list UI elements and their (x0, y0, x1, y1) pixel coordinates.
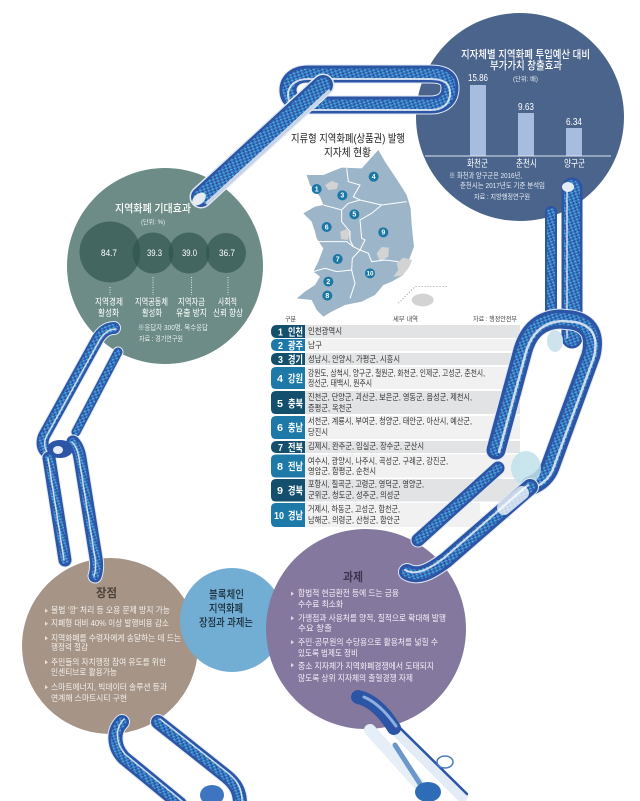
table column headers: 구분 (285, 315, 296, 323)
row labels: 3 (278, 354, 283, 366)
map number markers: 8 (325, 293, 329, 300)
advantage bullets: 행정력 절감 (51, 642, 88, 652)
panel: value-added effect bar chart (416, 13, 624, 221)
purple disc (266, 529, 466, 729)
advantage bullets: 지역화폐를 수령자에게 송달하는 데 드는 (51, 633, 181, 643)
bubble labels: 신뢰 향상 (213, 307, 243, 318)
row labels: 강원 (288, 372, 303, 385)
row labels: 8 (277, 461, 283, 473)
map number markers: 1 (315, 186, 319, 193)
advantage bullets: 지폐형 대비 40% 이상 발행비용 감소 (51, 618, 169, 628)
bar chart (425, 73, 611, 170)
chart footnote: 춘천시는 2017년도 기준 분석임 (460, 180, 545, 190)
bubble labels: 활성화 (142, 307, 162, 318)
panel footnote: ※응답자 300명, 복수응답 (138, 322, 208, 332)
challenge bullets: 수요 창출 (298, 623, 332, 633)
map number markers: 4 (372, 174, 376, 181)
panel title: 지역화폐 기대효과 (115, 201, 191, 215)
panel heading: 장점 (96, 586, 117, 600)
advantage bullets: 인센티브로 활용가능 (51, 667, 117, 677)
panel: challenges (266, 529, 466, 729)
link: top horizontal (288, 74, 450, 110)
chain: links connecting the discs (43, 74, 595, 801)
row labels (274, 326, 303, 522)
row details: 정선군, 태백시, 원주시 (308, 378, 372, 388)
link: bottom right (358, 697, 467, 801)
table column headers: 세부 내역 (393, 314, 418, 323)
row details: 군위군, 청도군, 성주군, 의성군 (308, 490, 400, 500)
row details: 여수시, 광양시, 나주시, 곡성군, 구례군, 강진군, (308, 456, 448, 466)
map of South Korea (297, 150, 447, 317)
row details: 증평군, 옥천군 (308, 403, 352, 413)
row label badges (271, 325, 305, 527)
map number markers (312, 172, 388, 301)
row details: 인천광역시 (308, 326, 342, 336)
map heading: 지류형 지역화폐(상품권) 발행 (291, 132, 405, 145)
panel: advantages (22, 558, 198, 734)
bar chart: 9.63 (518, 102, 534, 113)
link: right oval (496, 319, 595, 488)
link: left vertical (47, 440, 97, 576)
link: lower right diagonal (405, 468, 530, 574)
bubble labels: 유출 방지 (176, 308, 207, 318)
row labels: 10 (274, 510, 284, 522)
tan disc (22, 558, 198, 734)
panel: target region table (271, 314, 520, 527)
row labels: 전북 (288, 442, 303, 454)
row labels: 충북 (288, 398, 303, 410)
row labels: 6 (277, 422, 283, 434)
map heading (291, 132, 405, 159)
row labels: 7 (278, 442, 283, 454)
chart footnote: 자료 : 지방행정연구원 (474, 192, 530, 201)
row details: 남해군, 의령군, 산청군, 함안군 (308, 515, 400, 525)
callout: blockchain local currency: 장점과 과제는 (199, 616, 253, 629)
row labels: 2 (278, 340, 283, 352)
row labels: 경북 (288, 485, 303, 497)
challenge bullets: 합법적 현금환전 등에 드는 금융 (298, 588, 399, 598)
row labels: 광주 (288, 340, 303, 352)
chart footnote: ※ 화천과 양구군은 2016년, (449, 170, 522, 180)
map number markers: 5 (352, 212, 356, 219)
row labels: 전남 (288, 460, 303, 473)
challenge bullets: 있도록 법제도 정비 (298, 648, 358, 658)
bar chart: 6.34 (566, 117, 582, 128)
unit note: (단위: 배) (513, 74, 538, 83)
bubble labels: 지역경제 (95, 296, 123, 307)
row labels: 충남 (288, 421, 303, 434)
panel heading: 과제 (343, 569, 363, 584)
callout: blockchain local currency: 지역화폐 (209, 602, 243, 615)
panel footnote (138, 322, 208, 343)
map number markers: 7 (336, 256, 340, 263)
map number markers: 10 (366, 271, 374, 278)
bubble labels: 지역공동체 (135, 297, 168, 307)
panel: issuing municipalities map (291, 132, 447, 317)
callout: blockchain local currency (180, 568, 284, 672)
advantage bullets: 불법 '깡' 처리 등 오용 문제 방지 가능 (51, 605, 170, 615)
table column headers: 자료 : 행정안전부 (473, 314, 517, 323)
link: upper diagonal (190, 85, 329, 208)
map number markers: 9 (381, 230, 385, 237)
challenge bullets: 가맹점과 사용처를 양적, 질적으로 확대해 발행 (298, 613, 446, 623)
row details: 강원도, 삼척시, 양구군, 철원군, 화천군, 인제군, 고성군, 춘천시, (308, 368, 485, 378)
row details: 김제시, 완주군, 임실군, 장수군, 군산시 (308, 441, 424, 451)
green disc (67, 168, 263, 364)
unit note: (단위: %) (141, 217, 165, 226)
bar chart: 양구군 (564, 158, 585, 170)
bubble chart: 84.7 (101, 248, 117, 259)
bubble chart: 39.3 (147, 248, 162, 259)
chart title: 부가가치 창출효과 (490, 59, 562, 72)
bubble chart: 36.7 (219, 248, 235, 259)
panel footnote: 자료 : 경기연구원 (139, 334, 183, 343)
table row backgrounds (300, 325, 520, 527)
bubble labels: 사회적 (218, 296, 237, 307)
row details: 영암군, 함평군, 순천시 (308, 466, 376, 476)
bubble chart (80, 222, 246, 295)
row labels: 9 (277, 485, 283, 497)
table column headers (285, 314, 517, 323)
bar chart: 춘천시 (516, 158, 537, 170)
row labels: 1 (278, 326, 283, 338)
challenge bullets: 중소 지자체가 지역화폐경쟁에서 도태되지 (298, 661, 434, 671)
link: right vertical (551, 182, 574, 338)
row labels: 경남 (288, 509, 303, 522)
map number markers: 6 (325, 224, 329, 231)
chart footnote (449, 170, 545, 201)
map number markers: 2 (326, 279, 330, 286)
row labels: 5 (277, 398, 283, 410)
advantage bullets: 주민들의 자치행정 참여 유도를 위한 (51, 657, 166, 667)
callout: blockchain local currency: 블록체인 (209, 588, 244, 601)
map number markers: 3 (340, 193, 344, 200)
map heading: 지자체 현황 (324, 146, 371, 159)
row details (308, 326, 485, 525)
link: left diagonal (43, 328, 118, 454)
row details: 거제시, 하동군, 고성군, 합천군, (308, 504, 400, 514)
advantage bullets (45, 605, 181, 703)
row labels: 경기 (288, 353, 303, 366)
panel: expected effects (67, 168, 263, 364)
row details: 당진시 (308, 427, 328, 437)
chart title: 지자체별 지역화폐 투입예산 대비 (461, 47, 590, 61)
bubble labels: 지역자금 (178, 297, 205, 307)
bar chart: 화천군 (467, 158, 488, 170)
challenge bullets: 수수료 최소화 (298, 599, 343, 609)
row details: 서천군, 계룡시, 부여군, 청양군, 태안군, 아산시, 예산군, (308, 416, 472, 426)
advantage bullets: 연계해 스마트시티 구현 (51, 693, 127, 703)
challenge bullets: 않도록 상위 지자체의 출혈경쟁 자제 (298, 673, 413, 683)
challenge bullets: 주민·공무원의 수당용으로 활용처를 넓힐 수 (298, 637, 438, 647)
row labels: 4 (277, 373, 283, 385)
advantage bullets: 스마트에너지, 빅데이터 솔루션 등과 (51, 682, 167, 692)
row details: 남구 (308, 340, 322, 350)
bubble labels: 활성화 (98, 307, 119, 318)
bar chart: 15.86 (468, 73, 488, 84)
row details: 포항시, 칠곡군, 고령군, 영덕군, 영양군, (308, 479, 424, 489)
link: bottom left (115, 719, 242, 801)
challenge bullets (291, 588, 446, 683)
navy disc (416, 13, 624, 221)
row labels: 인천 (288, 326, 303, 338)
row details: 진천군, 단양군, 괴산군, 보은군, 영동군, 음성군, 제천시, (308, 392, 472, 402)
row details: 성남시, 안양시, 가평군, 시흥시 (308, 354, 400, 364)
chart title (461, 47, 590, 72)
bubble chart: 39.0 (182, 248, 197, 259)
bubble labels (95, 296, 243, 318)
